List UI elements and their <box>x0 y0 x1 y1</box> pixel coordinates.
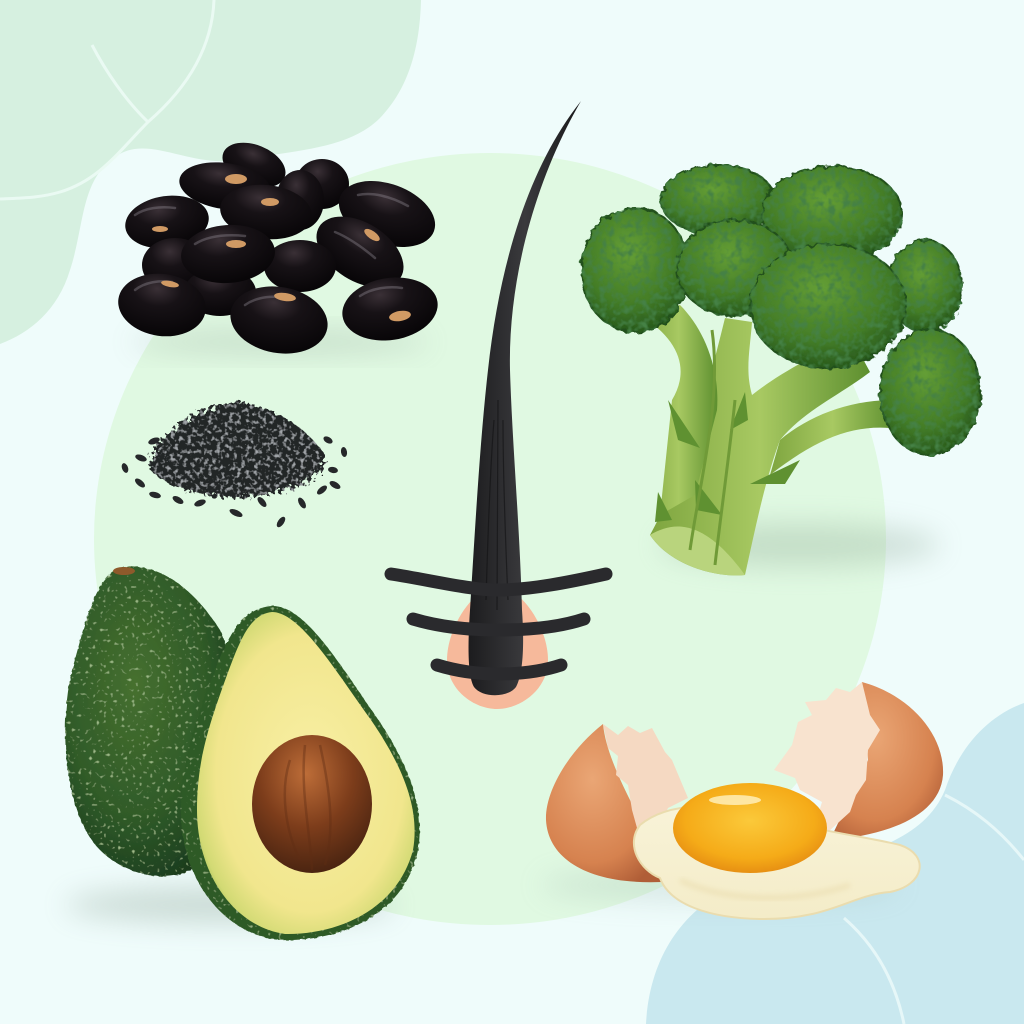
broccoli <box>581 165 980 575</box>
whole avocado <box>65 567 231 876</box>
bottom-right blue blob <box>646 703 1024 1024</box>
broccoli stalk <box>640 305 895 575</box>
follicle bars <box>391 574 606 674</box>
cracked egg <box>540 682 943 919</box>
black sesame seeds <box>120 402 348 529</box>
hair shaft <box>469 101 581 695</box>
yolk <box>673 783 827 873</box>
scattered seeds <box>120 435 348 529</box>
right shell <box>830 682 943 840</box>
avocado pit <box>252 735 372 873</box>
central green circle <box>94 153 886 925</box>
avocado <box>65 567 420 940</box>
broccoli florets <box>581 165 980 455</box>
follicle bulb <box>447 585 548 709</box>
black beans <box>114 134 444 361</box>
bean hilum marks <box>152 174 412 323</box>
egg white <box>634 806 920 919</box>
left shell <box>546 724 662 882</box>
hair strand and follicle <box>391 101 606 709</box>
cut avocado half <box>181 606 420 940</box>
bean highlights <box>135 194 408 305</box>
top-left green blob <box>0 0 421 344</box>
